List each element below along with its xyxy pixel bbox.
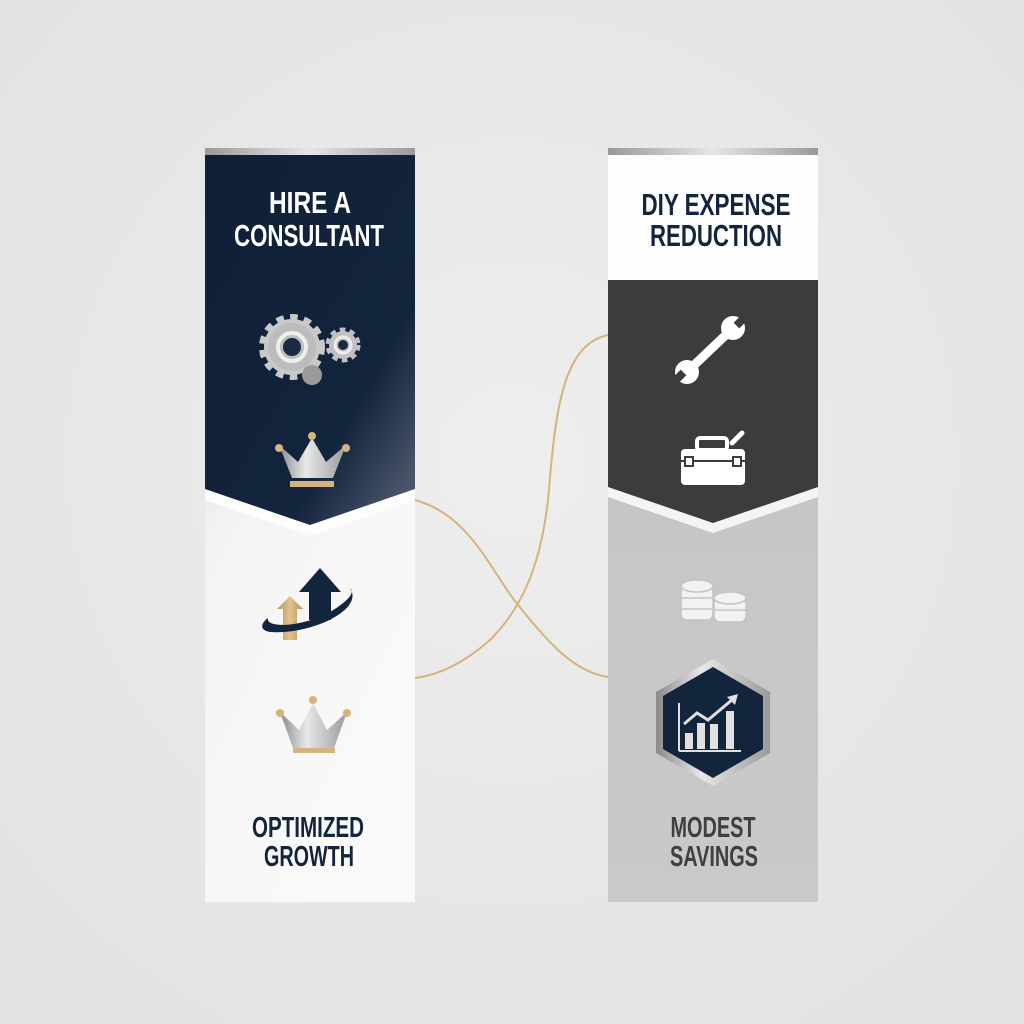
heading: diy expense reduction: DIY EXPENSE	[642, 187, 790, 222]
icon: chart hexagon	[656, 659, 770, 786]
panel: diy expense reduction	[608, 148, 818, 902]
icon: crown top	[275, 432, 350, 487]
icon: growth arrows	[262, 568, 353, 640]
panel: hire a consultant: GROWTH	[264, 841, 354, 873]
text: optimized growth: OPTIMIZED	[252, 812, 364, 844]
connector curves	[415, 335, 608, 678]
panel: hire a consultant: CONSULTANT	[234, 218, 384, 253]
icon: toolbox	[681, 433, 745, 485]
heading: hire a consultant: HIRE A	[269, 185, 351, 220]
icon: coins	[681, 580, 746, 622]
text: modest savings: MODEST	[670, 812, 756, 844]
icon: gears	[264, 319, 357, 385]
panel: hire a consultant	[205, 148, 415, 902]
panel: diy expense reduction: SAVINGS	[670, 841, 758, 873]
icon: wrench	[674, 316, 746, 384]
icon: crown bottom	[276, 696, 351, 753]
panel: diy expense reduction: REDUCTION	[650, 218, 782, 253]
